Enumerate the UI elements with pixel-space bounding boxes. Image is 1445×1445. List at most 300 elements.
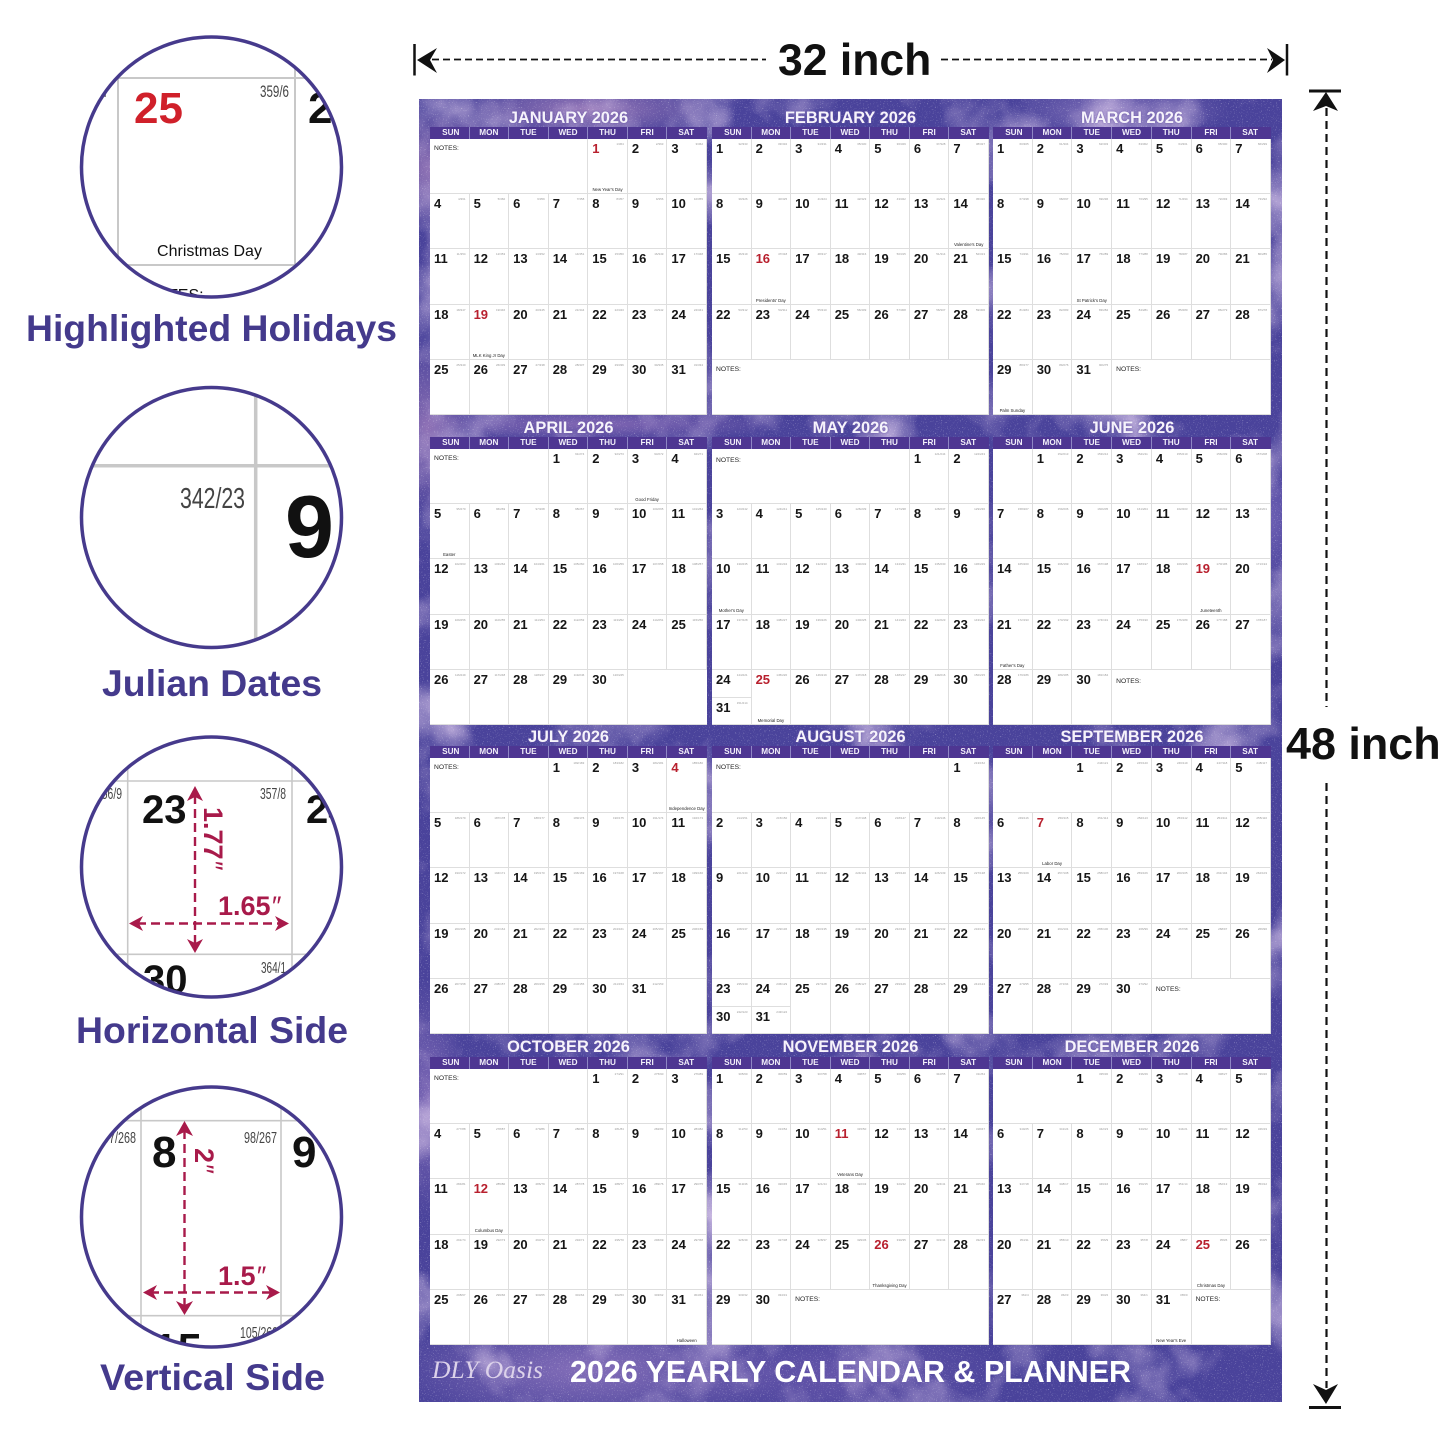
date grid: 173/192 [1058,618,1068,622]
month title: NOVEMBER 2026 [783,1038,918,1056]
date grid: 342/23 [1099,1127,1108,1131]
date grid: 270/95 [1020,982,1029,986]
date grid: 8 [553,815,560,830]
date grid: 21/344 [575,308,584,312]
date grid: 236/129 [776,982,787,986]
date grid: New Year's Eve [1156,1338,1186,1343]
callout: highlighted holidays magnifier: Christmas Day [157,243,262,260]
date grid: 31 [632,981,646,996]
date grid: 91/274 [575,452,584,456]
date grid [712,1069,989,1345]
date grid: 2 [1076,451,1084,466]
date grid: 28/337 [575,363,584,367]
weekday header: FRI [923,438,936,447]
date grid: 23 [756,1237,770,1252]
date grid: 140/225 [855,618,866,622]
callout: julian dates magnifier: 342/23 [180,483,245,515]
date grid: 26 [1235,1237,1250,1252]
date grid: 281/84 [615,1127,624,1131]
date grid: 7 [553,196,560,211]
date grid: 184/181 [653,761,663,765]
date grid: 14 [1037,870,1051,885]
date grid: 26 [474,362,488,377]
date grid: 22 [716,1237,730,1252]
date grid: 133/232 [855,562,866,566]
date grid: 291/74 [456,1238,466,1242]
date grid: 12 [1196,506,1210,521]
date grid: 363/2 [1101,1293,1108,1297]
date grid: 8 [716,1126,723,1141]
date grid: 159/206 [1058,507,1068,511]
weekday header: WED [558,1058,578,1067]
date grid: 334/31 [778,1293,787,1297]
date grid: 22 [553,926,567,941]
date grid: 28 [553,362,567,377]
date grid: 57/308 [897,308,906,312]
date grid: 3 [632,451,639,466]
date grid: 235/130 [737,982,748,986]
date grid: 150/215 [974,673,985,677]
date grid: 216/149 [816,816,827,820]
date grid: 25 [1116,307,1131,322]
date grid: Labor Day [1042,861,1062,866]
date grid: 15 [1076,1181,1091,1196]
date grid: 22 [592,1237,607,1252]
date grid: 324/41 [936,1182,945,1186]
date grid: 28 [553,1292,567,1307]
date grid: 11 [1156,506,1170,521]
date grid: 264/101 [1058,927,1068,931]
month: November 2026 [712,1038,989,1345]
date grid: 219/146 [935,816,945,820]
date grid: 19 [1235,870,1250,885]
weekday header: FRI [1204,128,1218,137]
weekday header: FRI [1204,747,1218,756]
weekday header: TUE [1084,438,1100,447]
heading: Vertical Side: Vertical Side [100,1357,325,1398]
weekday header [712,437,989,449]
date grid: 258/107 [1097,871,1108,875]
date grid: 215/150 [776,816,787,820]
date grid: 29 [553,672,567,687]
weekday header: WED [1122,438,1141,447]
date grid: 36/329 [897,142,906,146]
date grid: 290/75 [694,1182,703,1186]
date grid: 12 [795,561,810,576]
date grid: 12/353 [496,252,505,256]
date grid: 76/289 [1099,252,1108,256]
date grid: 329/36 [857,1238,866,1242]
date grid: 6 [914,141,921,156]
date grid: 11 [434,251,448,266]
date grid: 331/34 [936,1238,945,1242]
date grid: 12 [1235,815,1250,830]
month title: JUNE 2026 [1090,419,1174,437]
brand name: DLY Oasis [431,1357,543,1384]
date grid: 13 [835,561,849,576]
date grid: NOTES: [1196,1296,1220,1303]
date grid: Memorial Day [758,718,784,723]
date grid: 355/10 [1059,1238,1068,1242]
date grid: 3 [632,760,639,775]
date grid: 39/326 [738,197,748,201]
date grid: 12 [474,251,488,266]
date grid: 217/148 [855,816,866,820]
weekday header: SAT [960,747,976,756]
date grid: 263/102 [1018,927,1029,931]
date grid: 18 [835,1181,849,1196]
date grid: 13 [914,196,928,211]
date grid: 157/208 [1256,452,1267,456]
date grid: 277/88 [456,1127,466,1131]
date grid: 134/231 [895,562,906,566]
weekday header: TUE [802,1058,819,1067]
date grid: 1 [716,1071,723,1086]
date grid: 282/83 [654,1127,663,1131]
date grid: 1 [553,451,560,466]
date grid: Good Friday [635,497,659,502]
date grid: 26/339 [496,363,505,367]
date grid: 322/43 [857,1182,866,1186]
date grid: 2 [716,815,723,830]
date grid: 28 [914,981,928,996]
date grid: 362/3 [1061,1293,1068,1297]
date grid: 2 [1116,1071,1123,1086]
date grid: 58/307 [936,308,945,312]
date grid: 186/179 [455,816,466,820]
date grid: 229/136 [776,927,787,931]
date grid: 267/98 [1178,927,1188,931]
date grid: 27 [513,362,528,377]
date grid: 3 [795,141,802,156]
date grid: 94/271 [694,452,703,456]
month: April 2026 [430,419,707,725]
date grid: 18 [1196,870,1210,885]
date grid: 60/305 [1020,142,1029,146]
date grid: 330/35 [897,1238,906,1242]
weekday header: FRI [641,128,654,137]
date grid: 28 [1037,981,1051,996]
date grid: 316/49 [897,1127,906,1131]
date grid: Christmas Day [1197,1283,1225,1288]
date grid: 3/362 [695,142,703,146]
weekday header [430,127,707,139]
date grid: 10 [1156,1126,1170,1141]
date grid: 224/141 [855,871,866,875]
date grid: 19 [474,1237,488,1252]
date grid: 17 [1116,561,1131,576]
date grid: 238/127 [855,982,866,986]
date grid: 86/279 [1218,308,1227,312]
date grid: 14 [874,561,889,576]
date grid: 119/246 [574,673,584,677]
date grid: NOTES: [1156,986,1181,993]
date grid: 335/30 [1099,1072,1108,1076]
date grid: 18 [835,251,849,266]
date grid: NOTES: [434,1075,459,1082]
date grid: 12 [874,1126,889,1141]
callout: horizontal side cell size: 356/9 [96,786,122,803]
callout: vertical side cell size: 2 ″ [189,1148,219,1174]
date grid: 73/292 [1258,197,1267,201]
date grid: 9 [716,870,723,885]
weekday header [712,1057,989,1069]
date grid: 21 [997,617,1011,632]
date grid: 15 [592,251,607,266]
date grid: 12 [835,870,849,885]
date grid: 227/138 [974,871,985,875]
weekday header: THU [881,1058,898,1067]
date grid: 80/285 [1258,252,1267,256]
date grid: 65/300 [1218,142,1227,146]
month: February 2026 [712,109,989,415]
date grid: 8 [592,1126,600,1141]
date grid: 2 [632,1071,639,1086]
month title: MARCH 2026 [1081,109,1183,127]
date grid: 307/58 [818,1072,827,1076]
date grid: 4 [1116,141,1123,156]
date grid: 274/91 [615,1072,624,1076]
date grid: NOTES: [795,1296,820,1303]
date grid: 22 [1076,926,1091,941]
date grid: 5 [474,1126,481,1141]
date grid: 356/9 [1101,1238,1108,1242]
date grid [993,449,1271,725]
date grid: 30 [592,672,607,687]
callout: highlighted holidays magnifier: 25 [134,84,183,133]
date grid: 148/217 [895,673,906,677]
date grid: 208/157 [494,982,505,986]
date grid: 25 [1156,617,1170,632]
callout: highlighted holidays magnifier [80,37,357,304]
date grid: 96/269 [496,507,505,511]
weekday header: THU [881,128,898,137]
date grid: 200/165 [455,927,466,931]
weekday header: MON [1042,128,1062,137]
date grid: 7 [914,815,921,830]
date grid: 21 [553,307,567,322]
month title: DECEMBER 2026 [1065,1038,1199,1056]
date grid: 7 [874,506,882,521]
date grid: 26 [1156,307,1170,322]
date grid: 222/143 [776,871,787,875]
date grid: 4/361 [458,197,466,201]
date grid: 325/40 [976,1182,985,1186]
date grid: 8 [953,815,961,830]
date grid: 17/348 [694,252,703,256]
date grid: 2 [632,141,639,156]
weekday header [993,127,1271,139]
date grid: 112/253 [574,618,584,622]
date grid: 250/115 [1058,816,1068,820]
date grid: 292/73 [496,1238,505,1242]
date grid: 13 [914,1126,928,1141]
date grid: 294/71 [575,1238,584,1242]
date grid: 1 [997,141,1004,156]
weekday header: WED [1122,1058,1141,1067]
weekday header: SUN [724,1058,741,1067]
date grid: 8 [997,196,1004,211]
month title: JANUARY 2026 [509,109,628,127]
date grid: 25 [795,981,810,996]
date grid: 289/76 [654,1182,663,1186]
date grid: 188/177 [534,816,545,820]
date grid: 18 [1156,561,1170,576]
date grid: 231/134 [855,927,866,931]
date grid: 214/151 [737,816,748,820]
callout: horizontal side cell size: 23 [142,788,186,832]
date grid: 3 [1156,1071,1163,1086]
date grid: 27 [874,981,889,996]
date grid: 2 [1116,760,1123,775]
date grid: 142/223 [935,618,945,622]
date grid: 75/290 [1059,252,1068,256]
date grid [712,139,989,415]
weekday header: TUE [1084,747,1100,756]
date grid: 2 [592,760,600,775]
date grid: Presidents' Day [756,298,786,303]
month: August 2026 [712,728,989,1034]
weekday header [712,746,989,758]
date grid: 23 [592,617,607,632]
date grid: 3 [1156,760,1163,775]
date grid [993,139,1271,415]
date grid: 18 [434,1237,448,1252]
panel: feature callouts column [26,35,397,1398]
date grid: 23 [632,1237,646,1252]
date grid: 9 [592,506,600,521]
date grid: 192/173 [692,816,703,820]
date grid: 296/69 [654,1238,663,1242]
date grid: 319/46 [738,1182,748,1186]
date grid: 9 [632,1126,639,1141]
date grid: 6 [474,506,481,521]
weekday header: THU [881,438,898,447]
date grid: 1 [1037,451,1044,466]
date grid: 269/96 [1258,927,1267,931]
date grid: 12 [1235,1126,1250,1141]
date grid: 15 [1037,561,1051,576]
date grid: 201/164 [494,927,505,931]
weekday header: MON [761,128,780,137]
date grid: 223/142 [816,871,827,875]
date grid: 24/341 [694,308,703,312]
date grid: 10 [795,1126,810,1141]
date grid: 18 [795,926,810,941]
date grid: 18 [671,561,686,576]
weekday header: SAT [678,438,694,447]
date grid: 13 [874,870,889,885]
date grid: 14 [953,196,968,211]
date grid: 205/160 [653,927,663,931]
date grid: 61/304 [1059,142,1068,146]
date grid: 24 [716,672,730,687]
date grid: 207/158 [455,982,466,986]
date grid: 19 [1156,251,1170,266]
date grid: 6 [914,1071,921,1086]
weekday header: WED [558,128,578,137]
date grid [430,449,707,725]
weekday header: FRI [923,1058,936,1067]
date grid: 82/283 [1059,308,1068,312]
date grid: 352/13 [1218,1182,1227,1186]
weekday header: TUE [1084,1058,1100,1067]
weekday header: SAT [1242,747,1258,756]
date grid: 9 [1076,506,1084,521]
date grid: 136/229 [974,562,985,566]
date grid: 24 [671,307,686,322]
date grid: 135/230 [935,562,945,566]
heading: Horizontal Side: Horizontal Side [76,1010,348,1051]
date grid: 271/94 [1059,982,1068,986]
date grid: 312/53 [738,1127,748,1131]
date grid: 17 [716,617,730,632]
date grid: 16 [1076,561,1091,576]
month: January 2026 [430,109,707,415]
date grid: 131/234 [776,562,787,566]
weekday header: FRI [641,438,654,447]
date grid: NOTES: [716,457,741,464]
date grid: 26 [1235,926,1250,941]
weekday header: SUN [1005,128,1022,137]
date grid: 12 [434,561,448,576]
date grid: 19/346 [496,308,505,312]
date grid: 182/183 [573,761,584,765]
weekday header: THU [1163,128,1180,137]
date grid: 332/33 [976,1238,985,1242]
date grid: 24 [795,1237,810,1252]
date grid: 105/260 [573,562,584,566]
date grid: 3 [1076,141,1084,156]
weekday header: SAT [678,1058,694,1067]
date grid: 16 [592,870,607,885]
date grid: 8 [592,196,600,211]
date grid: 110/255 [495,618,505,622]
date grid: 180/185 [1058,673,1068,677]
weekday header: SAT [960,1058,976,1067]
date grid: 8 [1037,506,1044,521]
date grid: 333/32 [738,1293,748,1297]
date grid: 24 [1076,307,1091,322]
date grid: 14 [997,561,1011,576]
date grid: 122/243 [974,452,985,456]
date grid: 23 [1076,617,1091,632]
date grid: 169/196 [1177,562,1188,566]
weekday header: TUE [520,438,537,447]
date grid: 5 [795,506,802,521]
month title: FEBRUARY 2026 [785,109,916,127]
date grid: 29 [1076,1292,1091,1307]
date grid: 15 [914,561,928,576]
date grid: 304/61 [694,1293,703,1297]
date grid: 21 [1037,1237,1051,1252]
date grid: 302/63 [615,1293,624,1297]
date grid: 15 [553,870,567,885]
date grid: 327/38 [778,1238,787,1242]
month: March 2026 [993,109,1271,415]
date grid: 5 [1235,1071,1243,1086]
date grid: 20 [513,1237,528,1252]
date grid: 6 [835,506,842,521]
weekday header: MON [479,747,498,756]
weekday header: WED [1122,747,1141,756]
date grid: 46/319 [738,252,748,256]
date grid: 346/19 [1258,1127,1267,1131]
date grid: 243/122 [776,1010,787,1014]
date grid: 354/11 [1020,1238,1029,1242]
date grid: 31 [671,362,686,377]
date grid: 20 [835,617,849,632]
